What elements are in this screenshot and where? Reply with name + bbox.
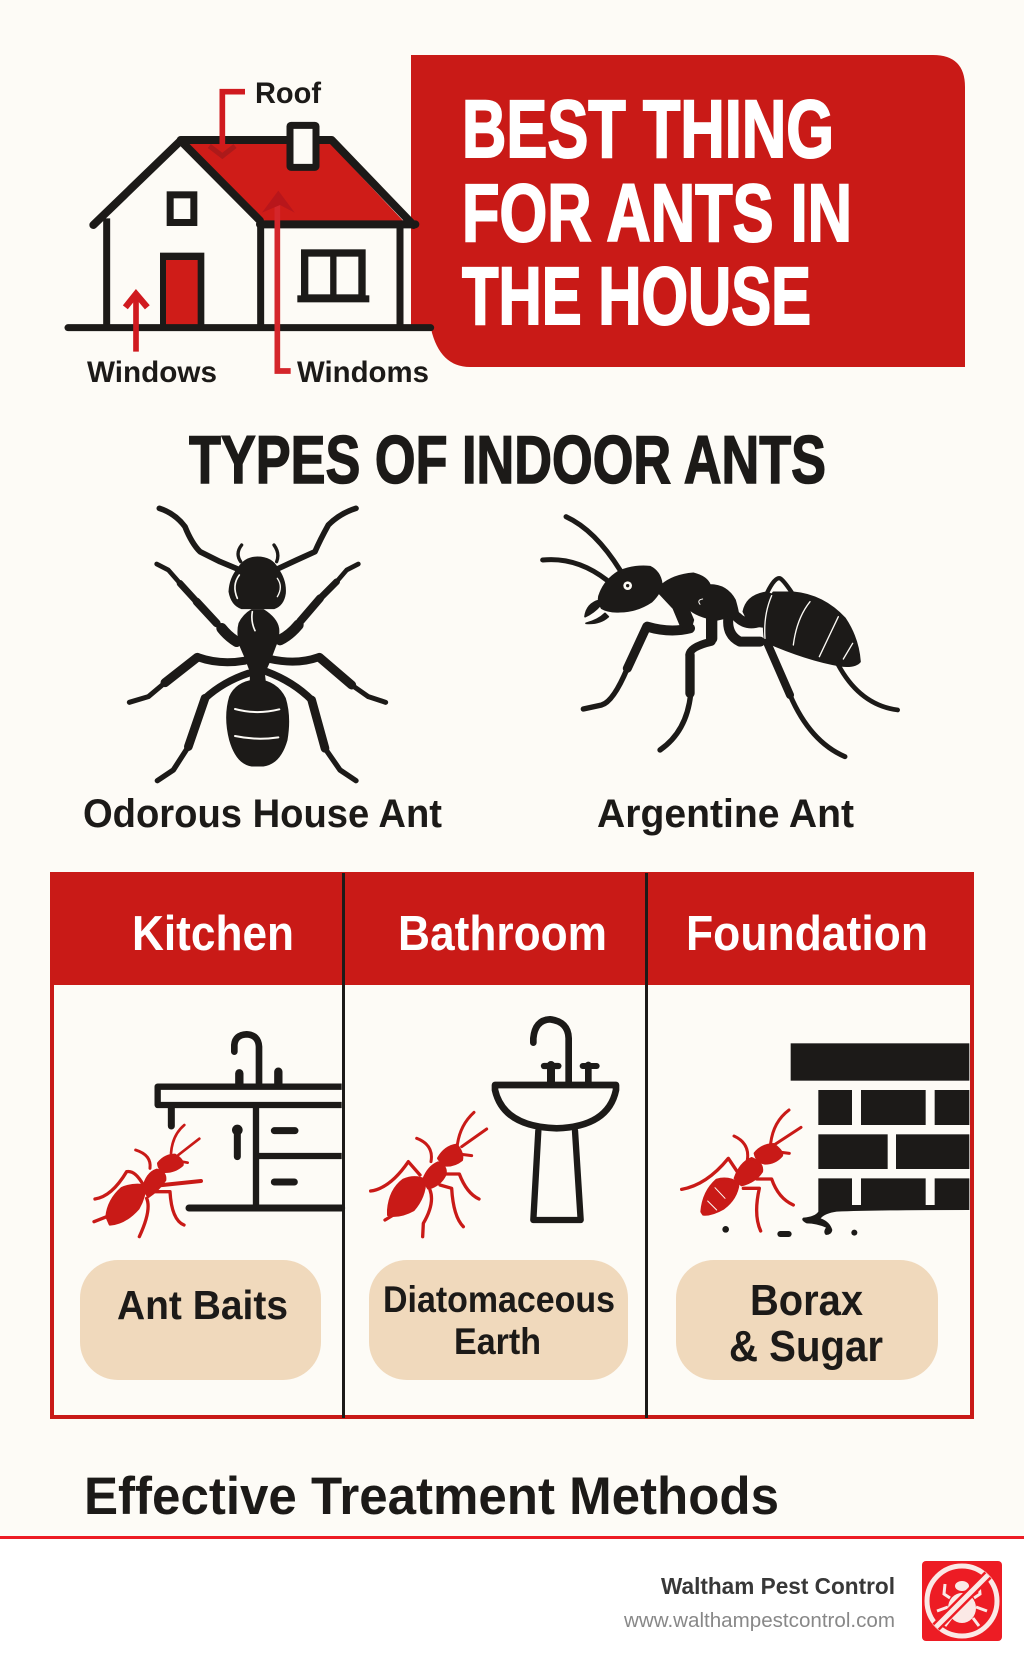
callout: borax and sugar: Borax: [750, 1276, 863, 1325]
heading: types of indoor ants: TYPES OF INDOOR ANTS: [189, 422, 826, 498]
title banner: [411, 55, 965, 367]
footer brand name: Waltham Pest Control: [661, 1573, 895, 1599]
callout: borax and sugar: & Sugar: [729, 1322, 883, 1371]
label: windows: Windows: [87, 356, 217, 389]
callout: diatomaceous earth: Earth: [454, 1321, 541, 1362]
icon: odorous house ant: [129, 508, 386, 781]
title text: [462, 84, 852, 342]
title text: THE HOUSE: [462, 251, 811, 342]
callout: diatomaceous earth: Diatomaceous: [383, 1279, 615, 1320]
icon: no pests logo: [922, 1561, 1002, 1641]
callout: ant baits: [80, 1260, 321, 1380]
title text: FOR ANTS IN: [462, 168, 852, 259]
icon: kitchen sink cabinet: [158, 1034, 342, 1208]
table: treatment by location: [50, 873, 974, 1418]
column heading: foundation: Foundation: [686, 907, 928, 961]
arrow: left window: [125, 294, 147, 352]
house illustration: [68, 77, 431, 389]
label: argentine ant: Argentine Ant: [597, 792, 854, 836]
label: odorous house ant: Odorous House Ant: [83, 792, 442, 836]
label: windoms: Windoms: [297, 356, 429, 389]
icon: red ant bathroom: [371, 1112, 487, 1237]
label: roof: Roof: [255, 77, 322, 110]
column heading: kitchen: Kitchen: [132, 907, 294, 961]
callout: ant baits: Ant Baits: [117, 1282, 288, 1328]
title text: BEST THING: [462, 84, 834, 175]
icon: red ant kitchen: [94, 1125, 201, 1237]
footer url: www.walthampestcontrol.com: [623, 1610, 895, 1632]
footer: [0, 1536, 1024, 1666]
arrow: right window: [262, 191, 295, 371]
callout: diatomaceous earth: [369, 1260, 628, 1380]
callout: borax and sugar: [676, 1260, 938, 1380]
arrow: roof: [209, 92, 245, 156]
icon: brick foundation wall: [722, 1043, 969, 1237]
heading: effective treatment methods: Effective Treatment Methods: [84, 1467, 779, 1526]
icon: bathroom sink: [495, 1019, 616, 1220]
column heading: bathroom: Bathroom: [398, 907, 607, 961]
icon: argentine ant: [543, 517, 898, 757]
icon: red ant foundation: [682, 1110, 801, 1231]
